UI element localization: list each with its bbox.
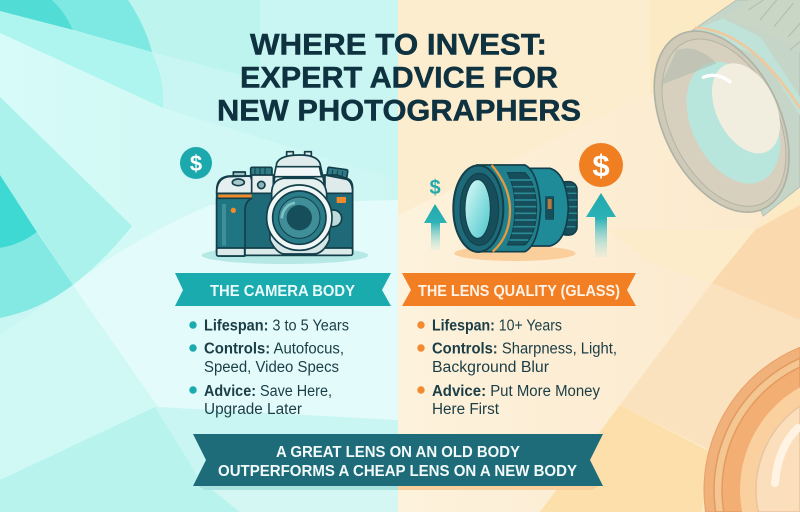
list: camera body points: Lifespan: 3 to 5 Years bbox=[204, 318, 349, 334]
banner: the lens quality bbox=[402, 273, 636, 306]
icon: small dollar and arrow bbox=[424, 177, 447, 250]
icon: lens bbox=[453, 165, 577, 261]
decorative lens bottom right bbox=[704, 347, 800, 512]
list: lens quality points: Lifespan: 10+ Years bbox=[432, 318, 562, 334]
icon: orange dollar coin bbox=[579, 143, 623, 187]
banner: the camera body: THE CAMERA BODY bbox=[210, 283, 355, 300]
list: camera body points: Advice: Save Here, bbox=[204, 383, 332, 400]
title: EXPERT ADVICE FOR bbox=[240, 62, 558, 94]
icon: dollar coin teal bbox=[180, 147, 212, 179]
callout banner bbox=[193, 434, 603, 490]
title bbox=[217, 28, 581, 128]
title: NEW PHOTOGRAPHERS bbox=[217, 94, 581, 128]
icon: large up arrow bbox=[586, 193, 616, 257]
callout banner: OUTPERFORMS A CHEAP LENS ON A NEW BODY bbox=[218, 463, 577, 480]
title: WHERE TO INVEST: bbox=[250, 28, 547, 62]
list: lens quality points: Here First bbox=[432, 401, 500, 418]
background: cream half bbox=[398, 0, 800, 512]
list: lens quality points: Background Blur bbox=[432, 359, 549, 376]
icon: small dollar and arrow: $ bbox=[429, 177, 441, 199]
icon: orange dollar coin: $ bbox=[592, 148, 610, 183]
list: camera body points: Controls: Autofocus, bbox=[204, 340, 344, 358]
list: lens quality points: Controls: Sharpness, Light, bbox=[432, 340, 617, 358]
icon: camera bbox=[202, 152, 368, 264]
banner: the camera body bbox=[175, 273, 391, 306]
list: camera body points: Upgrade Later bbox=[204, 401, 302, 418]
callout banner: A GREAT LENS ON AN OLD BODY bbox=[276, 444, 520, 461]
decorative lens top right bbox=[627, 0, 800, 234]
list: camera body points: Speed, Video Specs bbox=[204, 359, 339, 376]
list: lens quality points bbox=[417, 318, 617, 418]
list: lens quality points: Advice: Put More Money bbox=[432, 383, 600, 400]
background: teal half bbox=[0, 0, 398, 512]
list: camera body points bbox=[189, 318, 349, 418]
icon: dollar coin teal: $ bbox=[190, 151, 202, 176]
banner: the lens quality: THE LENS QUALITY (GLASS) bbox=[418, 283, 620, 300]
